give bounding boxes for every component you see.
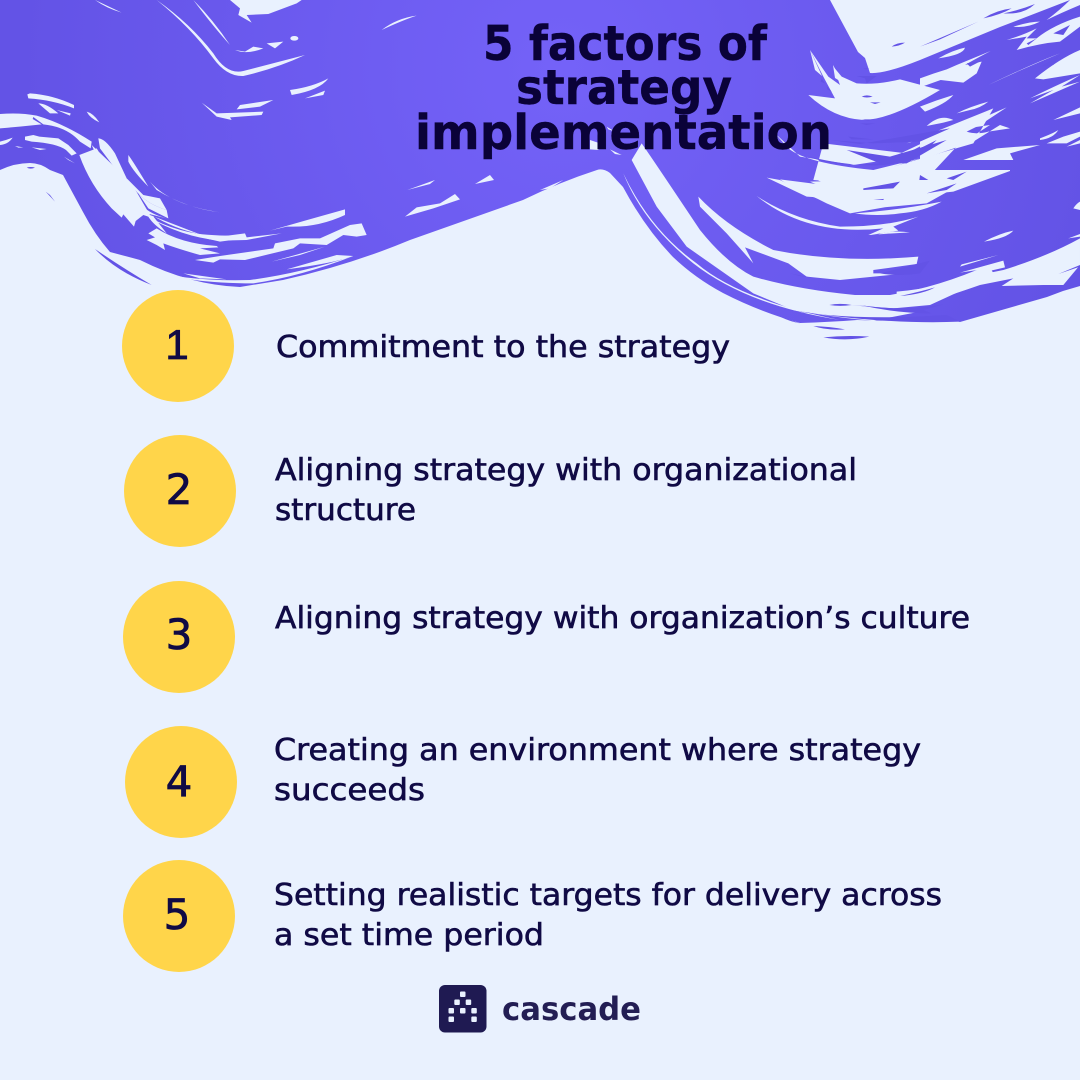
title: 5 factors of: [483, 16, 768, 72]
factor 5: a set time period: [274, 918, 544, 953]
factor 4: succeeds: [274, 773, 425, 808]
factor 2: [124, 435, 857, 547]
factor 5: [123, 860, 942, 972]
factor 3: 3: [166, 610, 192, 659]
factor 4: 4: [166, 757, 192, 806]
factor 1: [122, 290, 730, 402]
factor 2: 2: [166, 465, 192, 514]
factor 1: 1: [165, 321, 189, 368]
factor 1: Commitment to the strategy: [276, 330, 730, 365]
title: implementation: [415, 105, 832, 161]
cascade logo: cascade: [502, 990, 641, 1028]
title: strategy: [516, 60, 732, 116]
factor 2: structure: [275, 493, 416, 528]
brush stroke banner: [0, 0, 1080, 339]
factor 2: Aligning strategy with organizational: [275, 453, 857, 488]
factor 4: Creating an environment where strategy: [274, 733, 921, 768]
factor 5: 5: [164, 890, 190, 939]
title: [415, 16, 832, 161]
factor 4: [125, 726, 921, 838]
cascade logo: [439, 985, 641, 1032]
factor 3: Aligning strategy with organization’s culture: [275, 601, 970, 636]
factor 3: [123, 581, 970, 693]
factor 5: Setting realistic targets for delivery across: [274, 878, 942, 913]
